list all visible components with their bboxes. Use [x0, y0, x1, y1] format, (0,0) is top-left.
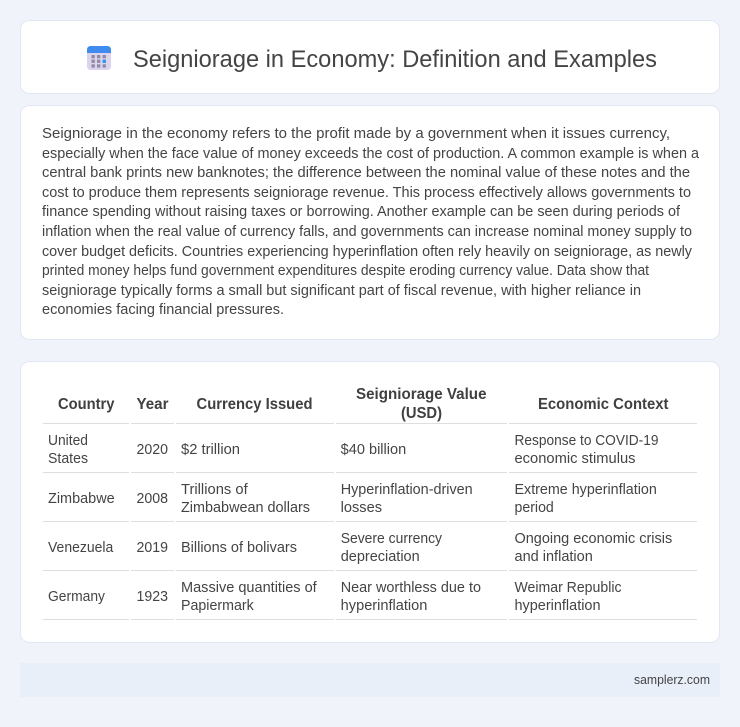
text block: definition: cover budget deficits. Countries experiencing hyperinflation often rely heavily on seigniorage, as newly	[42, 244, 693, 260]
table row: Venezuela: 2019	[136, 540, 168, 556]
table row: Zimbabwe: period	[514, 500, 554, 516]
table row: Venezuela: Billions of bolivars	[181, 540, 297, 556]
table row: Venezuela: depreciation	[341, 549, 420, 565]
footer bar	[20, 663, 720, 697]
table row: United States: United	[48, 433, 88, 449]
icon: calendar	[87, 46, 111, 70]
table row: United States: $40 billion	[341, 442, 406, 458]
text block: definition: seigniorage typically forms a small but significant part of fiscal revenue, with higher reliance in	[42, 283, 641, 299]
table row: United States: Response to COVID-19	[514, 433, 658, 449]
text block: definition: economies facing financial pressures.	[42, 302, 284, 318]
table row: Germany: Weimar Republic	[514, 580, 622, 596]
table row: Germany	[48, 580, 622, 614]
table row: Germany: hyperinflation	[341, 598, 427, 614]
table row: Zimbabwe	[48, 482, 657, 516]
footer source label: samplerz.com	[634, 673, 710, 687]
table header row	[58, 386, 668, 422]
table row: Zimbabwe: Trillions of	[181, 482, 249, 498]
table row: Zimbabwe: 2008	[136, 491, 168, 507]
table row: Germany: Germany	[48, 589, 106, 605]
table header row: Seigniorage Value	[356, 386, 487, 403]
table header row: Year	[136, 396, 168, 413]
text block: definition	[42, 126, 700, 318]
text block: definition: especially when the face value of money exceeds the cost of production. A common example is when a	[42, 146, 700, 162]
table header row: Country	[58, 396, 115, 413]
table row: Germany: 1923	[136, 589, 168, 605]
text block: definition: central bank prints new banknotes; the difference between the nominal value of these notes and the	[42, 165, 690, 181]
text block: definition: cost to produce them represents seigniorage revenue. This process effectively allows governments to	[42, 185, 691, 201]
table header row: Economic Context	[538, 396, 668, 413]
text block: definition: printed money helps fund government expenditures despite eroding currency value. Data show that	[42, 263, 649, 279]
table row: Zimbabwe: Zimbabwe	[48, 491, 115, 507]
table row: United States: $2 trillion	[181, 442, 240, 458]
table row: Venezuela: and inflation	[514, 549, 593, 565]
table row: United States: States	[48, 451, 88, 467]
table row: United States: 2020	[136, 442, 168, 458]
text block: definition: finance spending without raising taxes or borrowing. Another example can be seen during periods of	[42, 204, 681, 220]
table row: Germany: hyperinflation	[514, 598, 600, 614]
table row: Venezuela: Severe currency	[341, 531, 443, 547]
table row: Zimbabwe: Extreme hyperinflation	[514, 482, 657, 498]
table row: Venezuela	[48, 531, 672, 565]
text block: definition: Seigniorage in the economy refers to the profit made by a government when it issues currency,	[42, 126, 670, 142]
text block: definition: inflation when the real value of currency falls, and governments can increase nominal money supply to	[42, 224, 692, 240]
table row: United States: economic stimulus	[514, 451, 636, 467]
table row: Zimbabwe: Zimbabwean dollars	[181, 500, 310, 516]
table header row: (USD)	[401, 405, 442, 422]
title: Seigniorage in Economy: Definition and Examples	[133, 46, 657, 73]
panel: title header	[20, 20, 720, 94]
table header row: Currency Issued	[196, 396, 312, 413]
table row: Germany: Papiermark	[181, 598, 254, 614]
table row: Germany: Near worthless due to	[341, 580, 481, 596]
table row: Zimbabwe: Hyperinflation-driven	[341, 482, 473, 498]
panel: data table	[20, 362, 720, 642]
panel: description paragraph	[20, 106, 720, 340]
table row: Venezuela: Ongoing economic crisis	[514, 531, 672, 547]
table row: Venezuela: Venezuela	[48, 540, 114, 556]
table row: United States	[48, 433, 658, 467]
table row: Zimbabwe: losses	[341, 500, 382, 516]
table row: Germany: Massive quantities of	[181, 580, 318, 596]
